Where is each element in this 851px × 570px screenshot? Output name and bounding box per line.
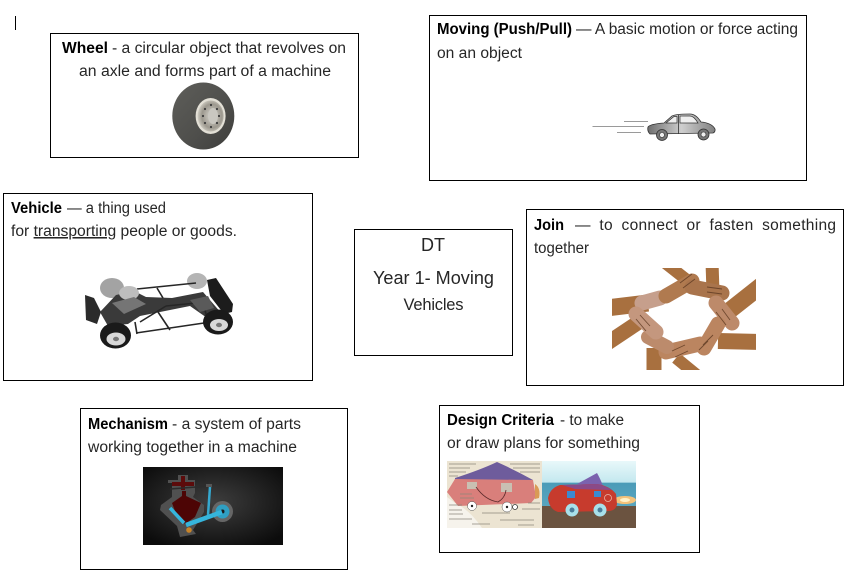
vehicle definition text: for transporting people or goods.: [11, 223, 237, 240]
join definition text: Join: [534, 217, 564, 234]
vehicle definition text: Vehicle: [11, 200, 62, 217]
wheel definition text: [62, 40, 346, 80]
panel: vehicle: [4, 194, 312, 380]
moving definition text: Moving (Push/Pull): [437, 21, 572, 38]
panel: wheel: [50, 34, 358, 158]
icon: moving car: [592, 114, 715, 140]
design criteria definition text: or draw plans for something: [447, 435, 640, 452]
design criteria definition text: Design Criteria: [447, 412, 554, 429]
vehicle definition text: [11, 200, 237, 240]
wheel definition text: - a circular object that revolves on: [112, 40, 346, 57]
image: engine mechanism: [143, 467, 283, 545]
icon: vehicle chassis: [85, 273, 233, 348]
moving definition text: on an object: [437, 45, 523, 62]
image: hand-drawn vehicle plan: [447, 461, 542, 528]
title text: Year 1- Moving: [373, 268, 494, 288]
title text: [373, 235, 494, 314]
join definition text: together: [534, 240, 589, 257]
title text: DT: [421, 235, 445, 255]
moving definition text: [437, 21, 798, 62]
icon: tyre: [172, 82, 234, 150]
title text: Vehicles: [404, 296, 464, 314]
mechanism definition text: Mechanism: [88, 416, 168, 433]
mechanism definition text: [87, 416, 301, 456]
panel: moving: [430, 16, 806, 180]
mechanism definition text: - a system of parts: [172, 416, 301, 433]
panel: design criteria: [440, 406, 700, 552]
join definition text: — to connect or fasten something: [575, 217, 836, 234]
panel: join: [526, 210, 844, 386]
panel: mechanism: [80, 408, 348, 570]
wheel definition text: Wheel: [62, 40, 108, 57]
image: digital vehicle render: [542, 461, 636, 528]
text cursor: [14, 16, 16, 30]
design criteria definition text: - to make: [560, 412, 624, 429]
mechanism definition text: working together in a machine: [87, 439, 297, 456]
join definition text: [534, 217, 836, 257]
design criteria definition text: [447, 412, 640, 452]
image: linked hands: [612, 268, 756, 370]
wheel definition text: an axle and forms part of a machine: [79, 63, 331, 80]
vehicle definition text: — a thing used: [67, 200, 166, 217]
panel: title: [354, 230, 512, 356]
moving definition text: — A basic motion or force acting: [576, 21, 798, 38]
